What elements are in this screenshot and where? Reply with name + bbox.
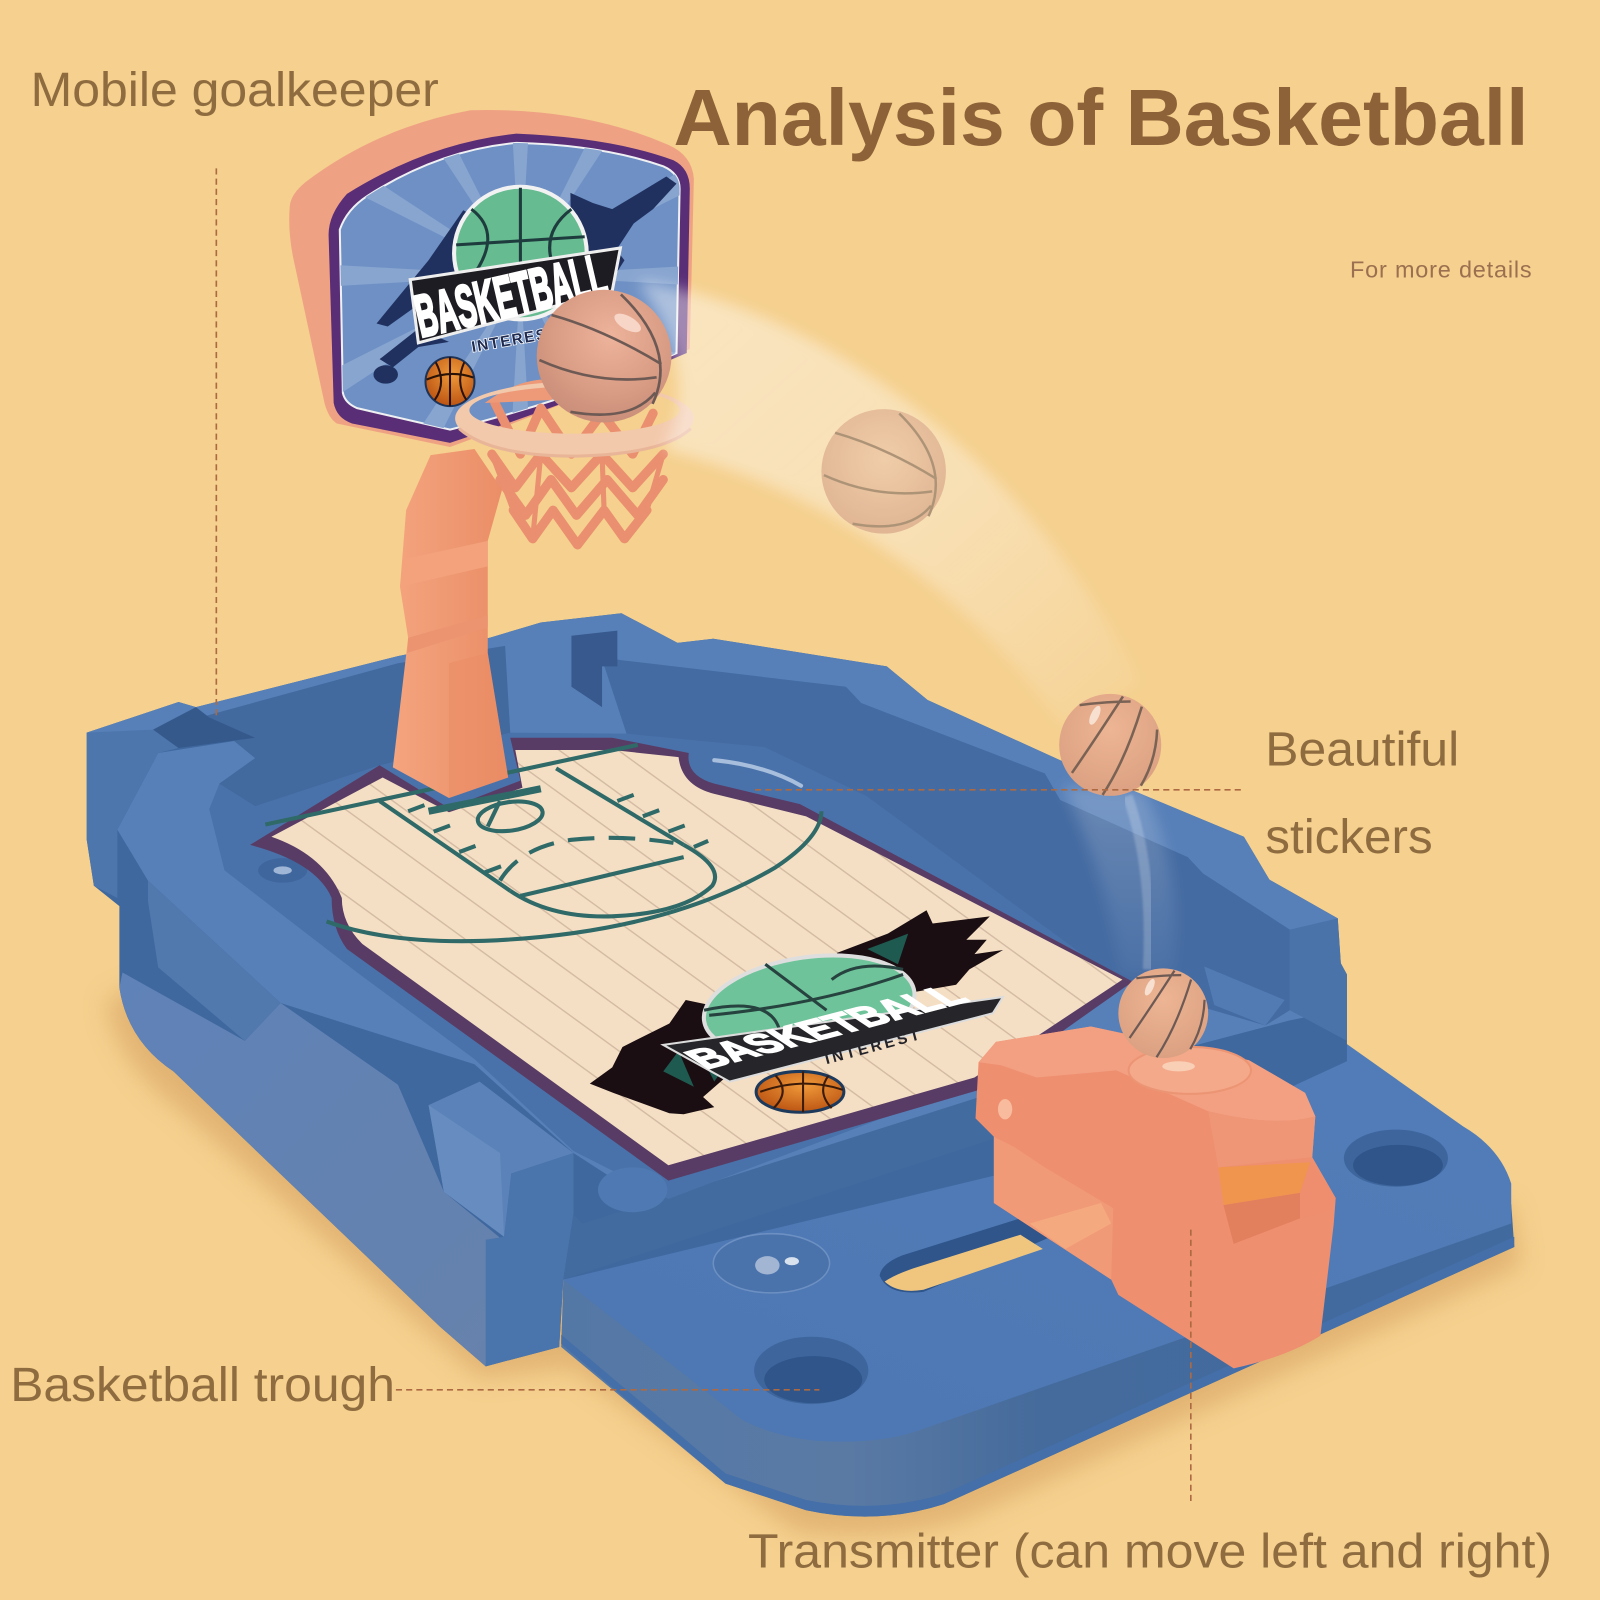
- tray ramp highlight: [714, 760, 801, 786]
- ball flight trail: [638, 281, 1176, 974]
- ball: descending: [1059, 694, 1161, 796]
- hole: left: [754, 1337, 868, 1404]
- logo small ball: [756, 1071, 844, 1112]
- top rim band: [87, 613, 1341, 1214]
- corner block front: [486, 1153, 573, 1366]
- court logo: [590, 910, 1003, 1114]
- label: beautiful stickers: Beautiful: [1265, 723, 1459, 776]
- leader line: transmitter: [1190, 1230, 1192, 1505]
- hoop pole: [393, 449, 508, 798]
- slider slot: [880, 1218, 1051, 1293]
- backboard splash: [373, 177, 677, 384]
- backboard rays: [340, 143, 680, 428]
- launcher pocket: [1218, 1162, 1310, 1205]
- dimple: [713, 1234, 830, 1293]
- launcher dome: [1129, 1047, 1251, 1094]
- ball: in the hoop: [537, 290, 671, 422]
- label: mobile goalkeeper: Mobile goalkeeper: [31, 64, 439, 117]
- notch: top: [571, 631, 617, 707]
- backboard wordmark band: [410, 248, 620, 343]
- notch: left: [153, 707, 255, 748]
- corner block top: [429, 1082, 573, 1237]
- ground shadow: [107, 918, 1520, 1535]
- backboard wordmark: BASKETBALL: [409, 241, 613, 350]
- launcher slider recess: [994, 1137, 1113, 1280]
- launcher pivot: [998, 1099, 1012, 1119]
- logo subtitle: INTEREST: [823, 1026, 924, 1068]
- leader line: stickers: [755, 789, 1242, 791]
- right end ledge: [1290, 918, 1347, 1041]
- left corner ledge: [87, 730, 179, 898]
- hole: right: [1344, 1130, 1448, 1187]
- tray front face: [563, 1097, 1000, 1280]
- label: beautiful stickers: [1265, 723, 1459, 864]
- backboard ball: [454, 187, 587, 319]
- logo splash: lower left: [590, 1000, 755, 1114]
- subtitle: for more details: For more details: [1350, 257, 1532, 283]
- launcher: [976, 1027, 1336, 1368]
- launcher lid: [979, 1027, 1315, 1121]
- label: transmitter: Transmitter (can move left and right): [748, 1525, 1552, 1578]
- launcher plate: [561, 1040, 1514, 1517]
- leader line: goalkeeper: [215, 168, 217, 716]
- outer front wall: [119, 972, 500, 1366]
- hoop rim: [455, 379, 694, 456]
- game base: [87, 613, 1514, 1517]
- label: beautiful stickers: stickers: [1265, 811, 1433, 864]
- ball: mid flight: [821, 409, 946, 534]
- backboard small ball: [426, 357, 474, 406]
- leader line: trough: [396, 1389, 819, 1391]
- side slot: [148, 881, 281, 1041]
- logo ball: [697, 943, 921, 1069]
- ball: on launcher: [1118, 968, 1208, 1058]
- dimple: court foot: [598, 1167, 667, 1212]
- launcher body: [976, 1027, 1336, 1368]
- label: basketball trough: Basketball trough: [10, 1359, 395, 1412]
- plate holes and slot: [713, 1130, 1448, 1404]
- tray well: [209, 653, 1121, 1199]
- logo splash: upper right: [837, 910, 1003, 995]
- title: Analysis of Basketball: [673, 73, 1529, 162]
- backboard subtitle: INTEREST: [470, 324, 560, 356]
- inner back wall: [204, 646, 510, 806]
- court sticker: [250, 738, 1133, 1181]
- tray body: [87, 613, 1347, 1366]
- tray dimple: left: [258, 858, 307, 883]
- logo wordmark: BASKETBALL: [675, 980, 979, 1075]
- logo wordmark band: [663, 997, 1003, 1082]
- court lines: [265, 745, 821, 941]
- net: [492, 403, 663, 545]
- backboard: [289, 110, 694, 447]
